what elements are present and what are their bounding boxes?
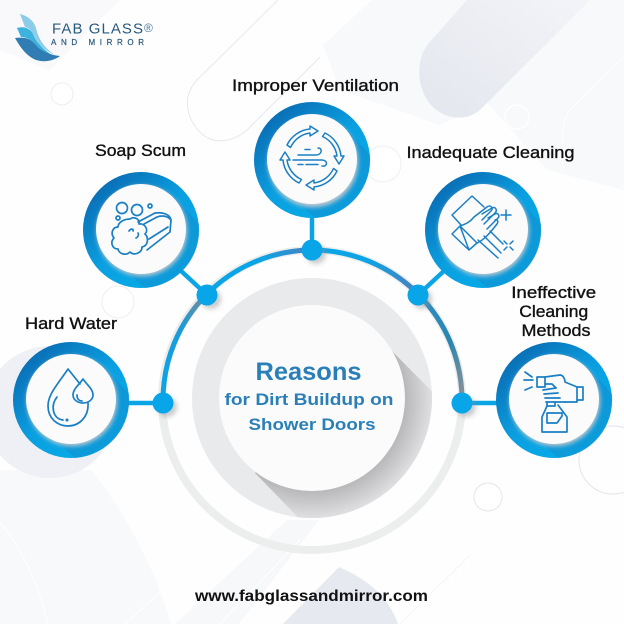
label: Inadequate Cleaning [406, 144, 574, 162]
panel: Improper Ventilation [232, 77, 399, 218]
logo [15, 14, 153, 61]
connector nodes [152, 240, 476, 417]
icon: spray bottle in hand [524, 372, 583, 432]
center circle [219, 305, 405, 491]
panel: Soap Scum [83, 142, 199, 288]
icon: soap and bubbles [112, 202, 171, 254]
label: Improper Ventilation [232, 77, 399, 95]
center circle shadow [255, 352, 432, 518]
brand tagline: AND MIRROR [51, 38, 144, 47]
icon: rotating arrows and wind [280, 126, 344, 190]
panel: Hard Water [13, 315, 129, 458]
logo mark [15, 14, 60, 61]
heading: Shower Doors: Shower Doors [248, 415, 376, 434]
label: Hard Water [25, 315, 118, 333]
panel: Inadequate Cleaning [406, 144, 574, 288]
label: Cleaning [519, 303, 588, 321]
icon: hand wiping with cloth [452, 196, 513, 258]
brand name: FAB GLASS [52, 20, 143, 38]
heading: Reasons: Reasons [256, 358, 362, 386]
registered mark: ® [144, 21, 153, 35]
website url: www.fabglassandmirror.com [194, 588, 428, 605]
panel: Ineffective Cleaning Methods [496, 284, 612, 458]
icon: water drops [48, 369, 93, 426]
central gray ring [162, 250, 462, 550]
connector arcs [163, 250, 462, 400]
label: Methods [522, 322, 590, 340]
connector stems [126, 215, 500, 403]
heading: for Dirt Buildup on: for Dirt Buildup on [224, 390, 394, 409]
label: Soap Scum [95, 142, 186, 160]
label: Ineffective [511, 284, 596, 302]
